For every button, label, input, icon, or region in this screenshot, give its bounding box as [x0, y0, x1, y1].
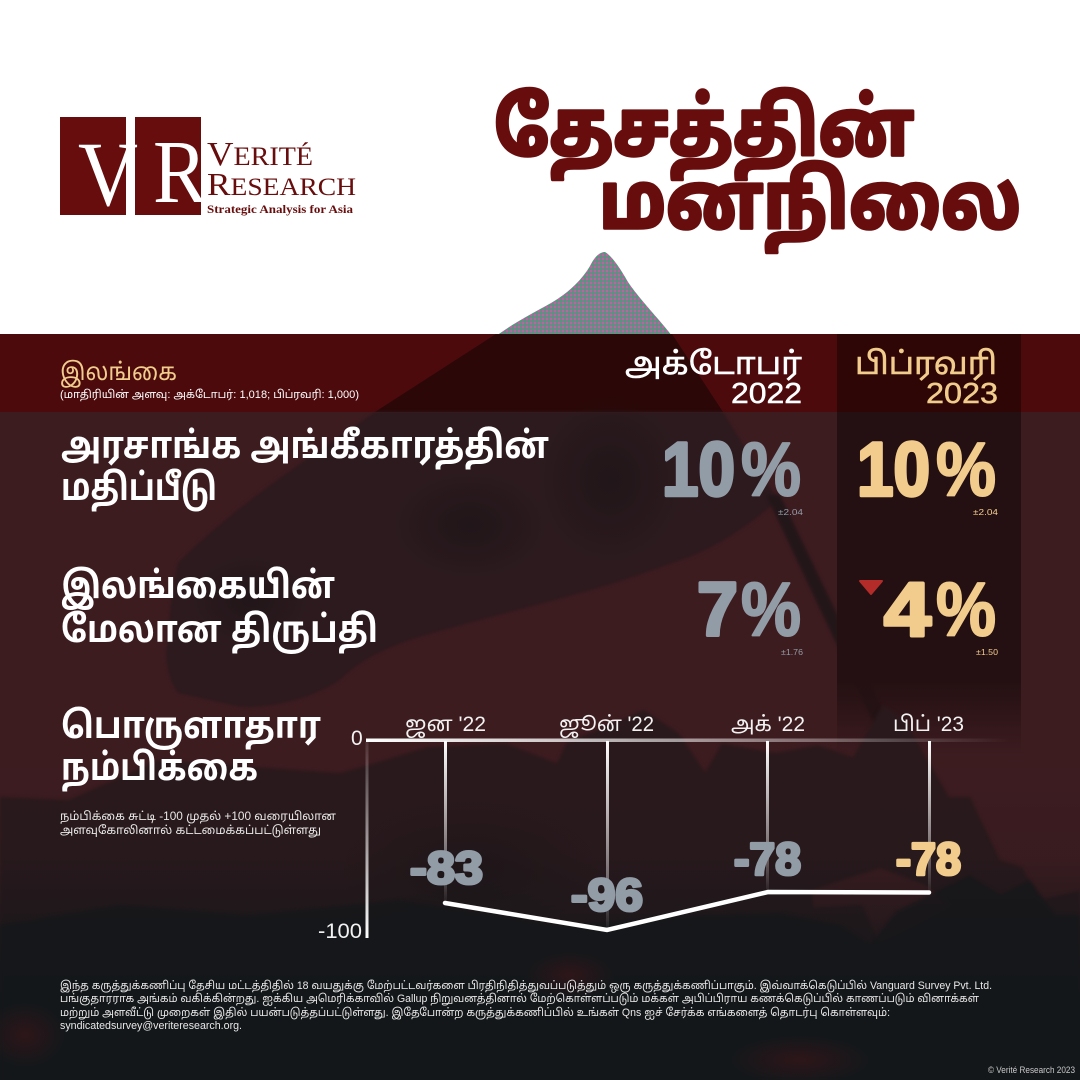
title: [494, 84, 1021, 253]
icon: down triangle: [860, 581, 882, 594]
axis labels: 0: [351, 727, 363, 750]
logo: Verité Research: VERITÉ: [207, 136, 313, 173]
header: country and sample size: இலங்கை: [60, 359, 177, 388]
note: confidence scale: [60, 810, 336, 838]
heading: government approval: மதிப்பீடு: [61, 467, 217, 512]
axes: [366, 738, 1010, 938]
value labels: [410, 834, 961, 920]
footer: methodology note: மற்றும் அளவீட்டு முறைகள் இதில் பயன்படுத்தப்பட்டுள்ளது. இதேபோன்ற கருத்துக்கணிப்பில் உங்கள் Qns ஐச் சேர்க்க எங்களைத் தொடர்பு கொள்ளவும்:: [60, 1006, 890, 1020]
metric: satisfaction February: [884, 568, 998, 657]
column header: October 2022: 2022: [731, 378, 802, 410]
footer: methodology note: பங்குதாரராக அங்கம் வகிக்கின்றது. ஐக்கிய அமெரிக்காவில் Gallup நிறுவனத்தினால் மேற்கொள்ளப்படும் மக்கள் அபிப்பிராய கணக்கெடுப்பில் காணப்படும் வினாக்கள்: [60, 992, 979, 1006]
heading: satisfaction with Sri Lanka: இலங்கையின்: [61, 565, 335, 610]
column header: February 2023: பிப்ரவரி: [855, 346, 997, 381]
period labels: பிப் '23: [893, 713, 964, 736]
title: தேசத்தின்: [494, 84, 914, 180]
header: country and sample size: [60, 359, 359, 402]
logo: Verité Research: R: [153, 123, 207, 222]
metric: satisfaction October: ±1.76: [781, 647, 803, 657]
metric: satisfaction February: %: [936, 568, 996, 652]
wedge of maroon behind the last data point: [813, 868, 950, 945]
metric: approval February: 10: [857, 428, 930, 512]
column header: February 2023: 2023: [926, 378, 998, 410]
value labels: -78: [734, 834, 801, 884]
metric: approval October: %: [741, 428, 801, 512]
axis labels: [318, 727, 363, 943]
footer: methodology note: syndicatedsurvey@veriteresearch.org.: [60, 1020, 242, 1032]
metric: approval February: %: [936, 428, 996, 512]
metric: approval October: ±2.04: [778, 507, 803, 517]
chart: economic confidence index: [318, 713, 1010, 943]
period labels: ஜன '22: [405, 713, 486, 738]
logo: Verité Research: [60, 117, 356, 225]
metric: approval February: ±2.04: [973, 507, 998, 517]
heading: economic confidence: நம்பிக்கை: [61, 747, 258, 792]
metric: approval October: [662, 428, 803, 517]
metric: satisfaction February: 4: [884, 568, 931, 652]
logo: Verité Research: RESEARCH: [207, 166, 356, 202]
heading: satisfaction with Sri Lanka: மேலான திருப்தி: [61, 609, 378, 654]
heading: economic confidence: பொருளாதார: [61, 705, 321, 750]
metric: approval October: 10: [662, 428, 735, 512]
value labels: -78: [896, 834, 961, 884]
drop lines: [444, 741, 931, 928]
metric: satisfaction October: 7: [697, 568, 738, 652]
value labels: -96: [571, 870, 643, 920]
footer: methodology note: [60, 979, 992, 1032]
heading: satisfaction with Sri Lanka: [61, 565, 378, 654]
metric: approval February: [857, 428, 998, 517]
trend line: [445, 892, 929, 930]
header: country and sample size: (மாதிரியின் அளவு: அக்டோபர்: 1,018; பிப்ரவரி: 1,000): [60, 388, 359, 402]
value labels: -83: [410, 842, 483, 894]
period labels: ஜூன் '22: [559, 713, 654, 738]
logo: Verité Research: Strategic Analysis for Asia: [207, 202, 353, 216]
heading: economic confidence: [61, 705, 321, 792]
period labels: [405, 713, 964, 738]
column header: February 2023: [855, 346, 998, 410]
title: மனநிலை: [599, 157, 1021, 253]
metric: satisfaction October: %: [741, 568, 801, 652]
footer: methodology note: இந்த கருத்துக்கணிப்பு தேசிய மட்டத்திதில் 18 வயதுக்கு மேற்பட்டவர்களை பிரதிநிதித்துவப்படுத்தும் ஒரு கருத்துக்கணிப்பாகும். இவ்வாக்கெடுப்பில் Vanguard Survey Pvt. Ltd.: [60, 979, 992, 993]
heading: government approval: அரசாங்க அங்கீகாரத்தின்: [61, 425, 549, 470]
metric: satisfaction February: ±1.50: [976, 647, 998, 657]
column header: October 2022: அக்டோபர்: [625, 346, 802, 381]
axis labels: -100: [318, 920, 362, 943]
logo: Verité Research: V: [78, 123, 138, 225]
heading: government approval: [61, 425, 549, 512]
note: confidence scale: நம்பிக்கை சுட்டி -100 முதல் +100 வரையிலான: [60, 810, 336, 824]
note: confidence scale: அளவுகோலினால் கட்டமைக்கப்பட்டுள்ளது: [60, 824, 321, 838]
column header: October 2022: [625, 346, 802, 410]
period labels: அக் '22: [731, 713, 805, 736]
metric: satisfaction October: [697, 568, 803, 657]
